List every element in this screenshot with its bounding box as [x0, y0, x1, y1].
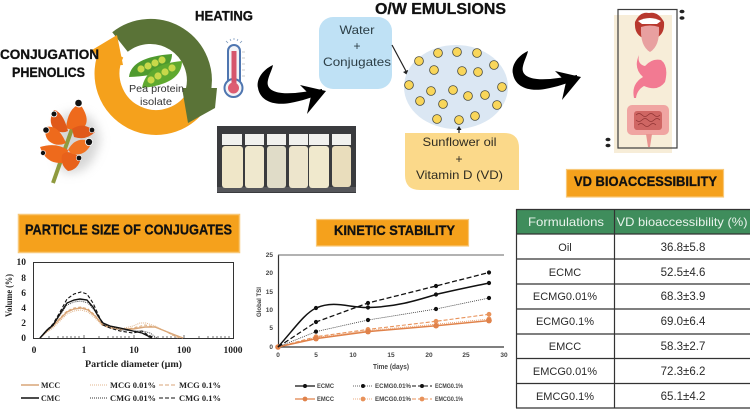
bottle 2: [245, 134, 264, 188]
orange arrowhead: [92, 35, 123, 66]
curve: CMG 0.01%: [40, 301, 157, 338]
arrow: water to emulsion: [392, 45, 410, 77]
title: particle size of conjugates: [18, 214, 240, 252]
x axis ticks: [49, 335, 229, 338]
arrow: heating to water: [258, 65, 326, 114]
box: water plus conjugates: +: [353, 39, 361, 53]
legend: [295, 383, 463, 403]
curve: MCC: [40, 308, 183, 338]
row: ECMG0.1%: 69.0±6.4: [661, 316, 706, 328]
row: Oil: 36.8±5.8: [661, 242, 705, 254]
legend: CMC: [41, 394, 60, 403]
label: pea protein isolate: [129, 83, 184, 108]
legend: CMG 0.01%: [110, 394, 156, 403]
row: EMCG0.01%: EMCG0.01%: [533, 366, 597, 378]
icon: stomach: [633, 55, 666, 98]
y axis labels: 10: [16, 258, 26, 268]
icon: mouth: [635, 13, 664, 52]
x axis title: Time (days): [373, 364, 409, 371]
y axis labels: 15: [266, 289, 273, 296]
row: ECMC: ECMC: [549, 267, 581, 279]
box: sunflower oil plus vitamin D: Vitamin D (VD): [416, 168, 503, 182]
row: EMCC: 58.3±2.7: [661, 341, 705, 353]
y axis title: Global TSI: [256, 287, 263, 317]
legend: MCC: [41, 381, 60, 390]
row: ECMC: 52.5±4.6: [661, 267, 705, 279]
legend: EMCG0.01%: [375, 396, 411, 403]
row: ECMG0.1%: [536, 316, 706, 328]
row: ECMC: [549, 267, 705, 279]
table: VD bioaccessibility by formulation: [516, 209, 750, 408]
box: sunflower oil plus vitamin D: +: [455, 152, 463, 166]
y axis labels: 2: [21, 319, 26, 329]
bottle 6: [332, 134, 351, 187]
curve: MCG 0.01%: [40, 310, 178, 338]
box: water plus conjugates: [319, 17, 392, 89]
x axis labels: 30: [500, 352, 508, 359]
legend: CMG 0.1%: [179, 394, 221, 403]
bottle 3: [267, 134, 286, 188]
box: water plus conjugates: Conjugates: [323, 55, 391, 69]
x axis labels: 15: [387, 352, 395, 359]
legend: EMCC: [317, 396, 334, 403]
bottle 4: [289, 134, 308, 188]
legend: ECMG0.01%: [375, 383, 411, 390]
icon: pea pods: [129, 54, 182, 88]
row: EMCC: EMCC: [549, 341, 581, 353]
green arc arrow: [120, 31, 217, 123]
x axis labels: 1: [82, 346, 87, 356]
series: EMCG0.1%: [278, 312, 491, 347]
table header: Formulations: [528, 215, 604, 229]
y axis labels: [266, 252, 273, 351]
row: EMCG0.1%: 65.1±4.2: [661, 391, 705, 403]
row: ECMG0.1%: ECMG0.1%: [536, 316, 594, 328]
x axis labels: [276, 352, 508, 359]
y axis title: Volume (%): [4, 274, 15, 317]
row: Oil: Oil: [558, 242, 572, 254]
label: pea protein isolate: Pea protein: [129, 83, 184, 95]
table grid: [516, 209, 750, 408]
label: pea protein isolate: isolate: [140, 96, 172, 108]
photo: emulsion bottles: [217, 126, 356, 193]
curve: MCG 0.1%: [40, 307, 180, 338]
row: EMCG0.01%: [533, 366, 705, 378]
row: Oil: [558, 242, 705, 254]
curve: CMG 0.1%: [40, 292, 155, 338]
series: ECMG0.01%: [278, 296, 491, 347]
y axis labels: 5: [269, 325, 273, 332]
emulsion droplet circle: [404, 45, 508, 129]
y axis labels: 8: [21, 274, 26, 284]
y axis labels: 0: [21, 334, 26, 344]
x axis labels: 0: [32, 346, 37, 356]
box: sunflower oil plus vitamin D: [405, 133, 519, 190]
row: ECMG0.01%: ECMG0.01%: [533, 291, 597, 303]
heading: phenolics: PHENOLICS: [12, 64, 85, 80]
title: particle size of conjugates: PARTICLE SIZE OF CONJUGATES: [25, 222, 232, 238]
x axis labels: 0: [276, 352, 280, 359]
series: EMCG0.01%: [278, 317, 491, 347]
series: ECMC: [278, 281, 491, 347]
heading: conjugation: CONJUGATION: [0, 46, 99, 62]
icon: quote marks top: [680, 10, 684, 20]
y axis labels: 0: [269, 344, 273, 351]
panel: digestive tract: [606, 10, 684, 153]
heading: O/W emulsions: O/W EMULSIONS: [375, 1, 506, 18]
icon: thermometer: [224, 38, 245, 97]
orange arc: [107, 52, 200, 122]
y axis labels: [16, 258, 26, 344]
x axis labels: [32, 346, 243, 356]
title: kinetic stability: [316, 220, 468, 246]
y axis labels: 6: [21, 289, 26, 299]
series: EMCC: [275, 318, 492, 350]
chart: global TSI over time: [256, 252, 508, 403]
row: ECMG0.01%: [533, 291, 705, 303]
row: EMCG0.01%: 72.3±6.2: [661, 366, 705, 378]
bottle 1: [222, 134, 243, 188]
legend: ECMG0.1%: [435, 383, 463, 390]
box: sunflower oil plus vitamin D: Sunflower oil: [422, 135, 496, 149]
title: VD bioaccessibility: [566, 170, 724, 197]
x axis labels: 10: [129, 346, 139, 356]
x axis labels: 1000: [224, 346, 243, 356]
x axis labels: 10: [349, 352, 357, 359]
box: water plus conjugates: Water: [340, 23, 374, 37]
x axis labels: 25: [462, 352, 470, 359]
title: kinetic stability: KINETIC STABILITY: [334, 222, 456, 238]
legend: EMCG0.1%: [435, 396, 463, 403]
y axis labels: 20: [266, 270, 273, 277]
table header: [516, 209, 750, 234]
chart: particle size distribution: [4, 258, 243, 403]
row: EMCC: [549, 341, 705, 353]
heading: heating: HEATING: [195, 8, 253, 24]
bottle 5: [309, 134, 329, 188]
legend: MCG 0.01%: [110, 381, 156, 390]
x axis labels: 20: [425, 352, 433, 359]
cycle ring arrows: [92, 31, 217, 123]
y axis labels: 25: [266, 252, 273, 259]
x axis labels: 5: [314, 352, 318, 359]
title: VD bioaccessibility: VD BIOACCESSIBILITY: [574, 173, 718, 189]
x axis title: Particle diameter (µm): [85, 359, 182, 370]
y axis labels: 10: [266, 307, 273, 314]
arrow: oil to emulsion: [456, 126, 462, 133]
row: EMCG0.1%: EMCG0.1%: [536, 391, 594, 403]
row: ECMG0.01%: 68.3±3.9: [661, 291, 705, 303]
icon: intestines: [627, 105, 669, 147]
curve: CMC: [40, 299, 152, 338]
icon: guarana plant: [40, 98, 100, 183]
icon: quote marks bottom: [606, 138, 610, 147]
legend: [21, 381, 221, 403]
legend: ECMC: [317, 383, 334, 390]
series: ECMG0.1%: [278, 270, 491, 347]
arrow: emulsion to digestion: [513, 51, 581, 100]
x axis labels: 100: [177, 346, 191, 356]
legend: MCG 0.1%: [179, 381, 221, 390]
row: EMCG0.1%: [536, 391, 705, 403]
y axis labels: 4: [21, 304, 26, 314]
table header: VD bioaccessibility (%): [616, 215, 748, 229]
